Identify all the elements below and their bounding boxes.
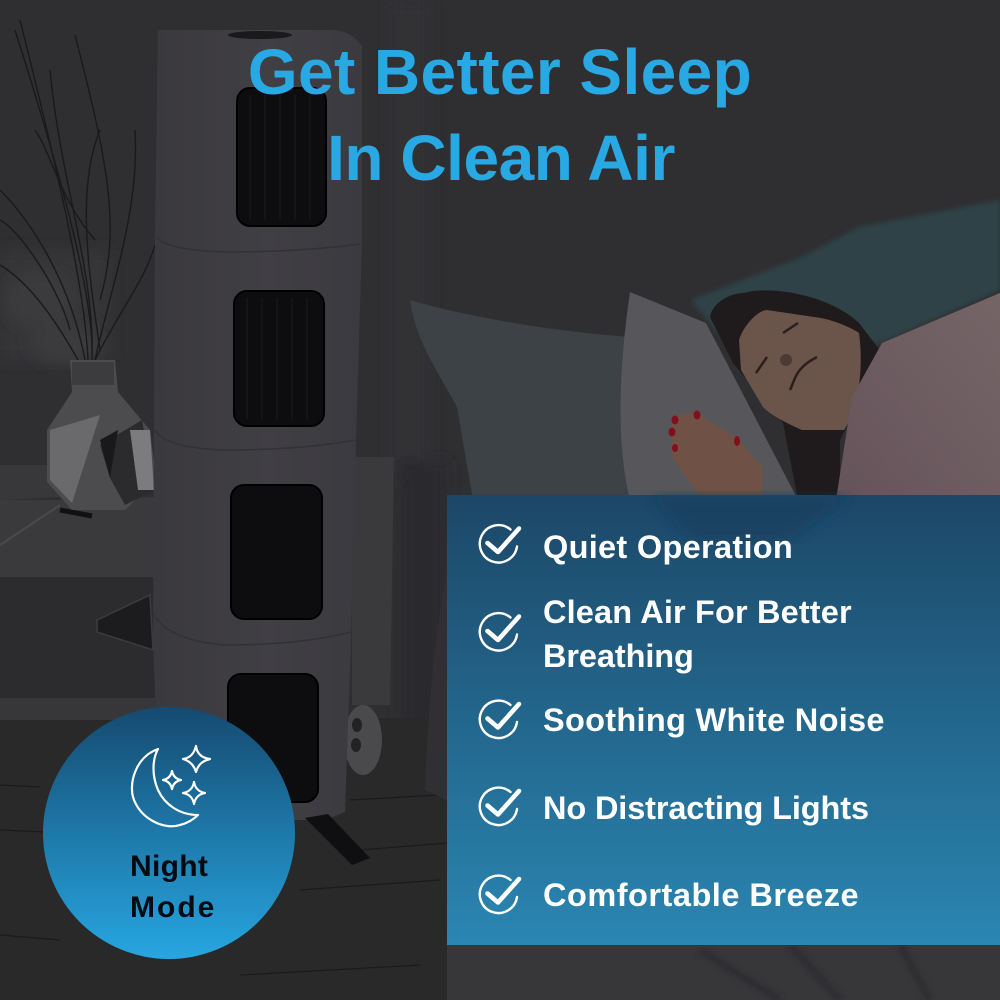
text: clean air [543, 594, 852, 674]
panel bedding folds [650, 495, 850, 540]
title line 1: Get Better Sleep [248, 36, 752, 108]
icon: moon and stars [132, 746, 210, 826]
text: night mode: Mode [130, 891, 216, 924]
text: clean air: Breathing [543, 638, 694, 674]
icon: check 3 [480, 701, 519, 738]
dried branches and blossoms [0, 20, 155, 365]
pillows and bedding [410, 200, 1000, 1000]
sleeping woman [668, 290, 1000, 500]
text: night mode: Night [130, 850, 208, 883]
text: quiet operation: Quiet Operation [543, 529, 793, 565]
text: night mode [130, 850, 216, 924]
badge: night mode disc [43, 707, 295, 959]
text: breeze: Comfortable Breeze [543, 877, 859, 913]
wall shading [0, 0, 447, 760]
title line 2: In Clean Air [327, 122, 675, 194]
text: clean air: Clean Air For Better [543, 594, 852, 630]
air purifier tower [153, 30, 370, 865]
side table [0, 457, 394, 720]
wheel [344, 705, 382, 775]
glass vase [47, 360, 156, 510]
text: white noise: Soothing White Noise [543, 702, 885, 738]
icon: check 2 [480, 613, 519, 651]
icon: check 4 [480, 788, 519, 825]
icon: check 5 [480, 876, 519, 913]
icon: check 1 [480, 525, 519, 563]
text: no lights: No Distracting Lights [543, 790, 869, 826]
floor [0, 718, 450, 1000]
panel: feature list [447, 495, 1000, 945]
